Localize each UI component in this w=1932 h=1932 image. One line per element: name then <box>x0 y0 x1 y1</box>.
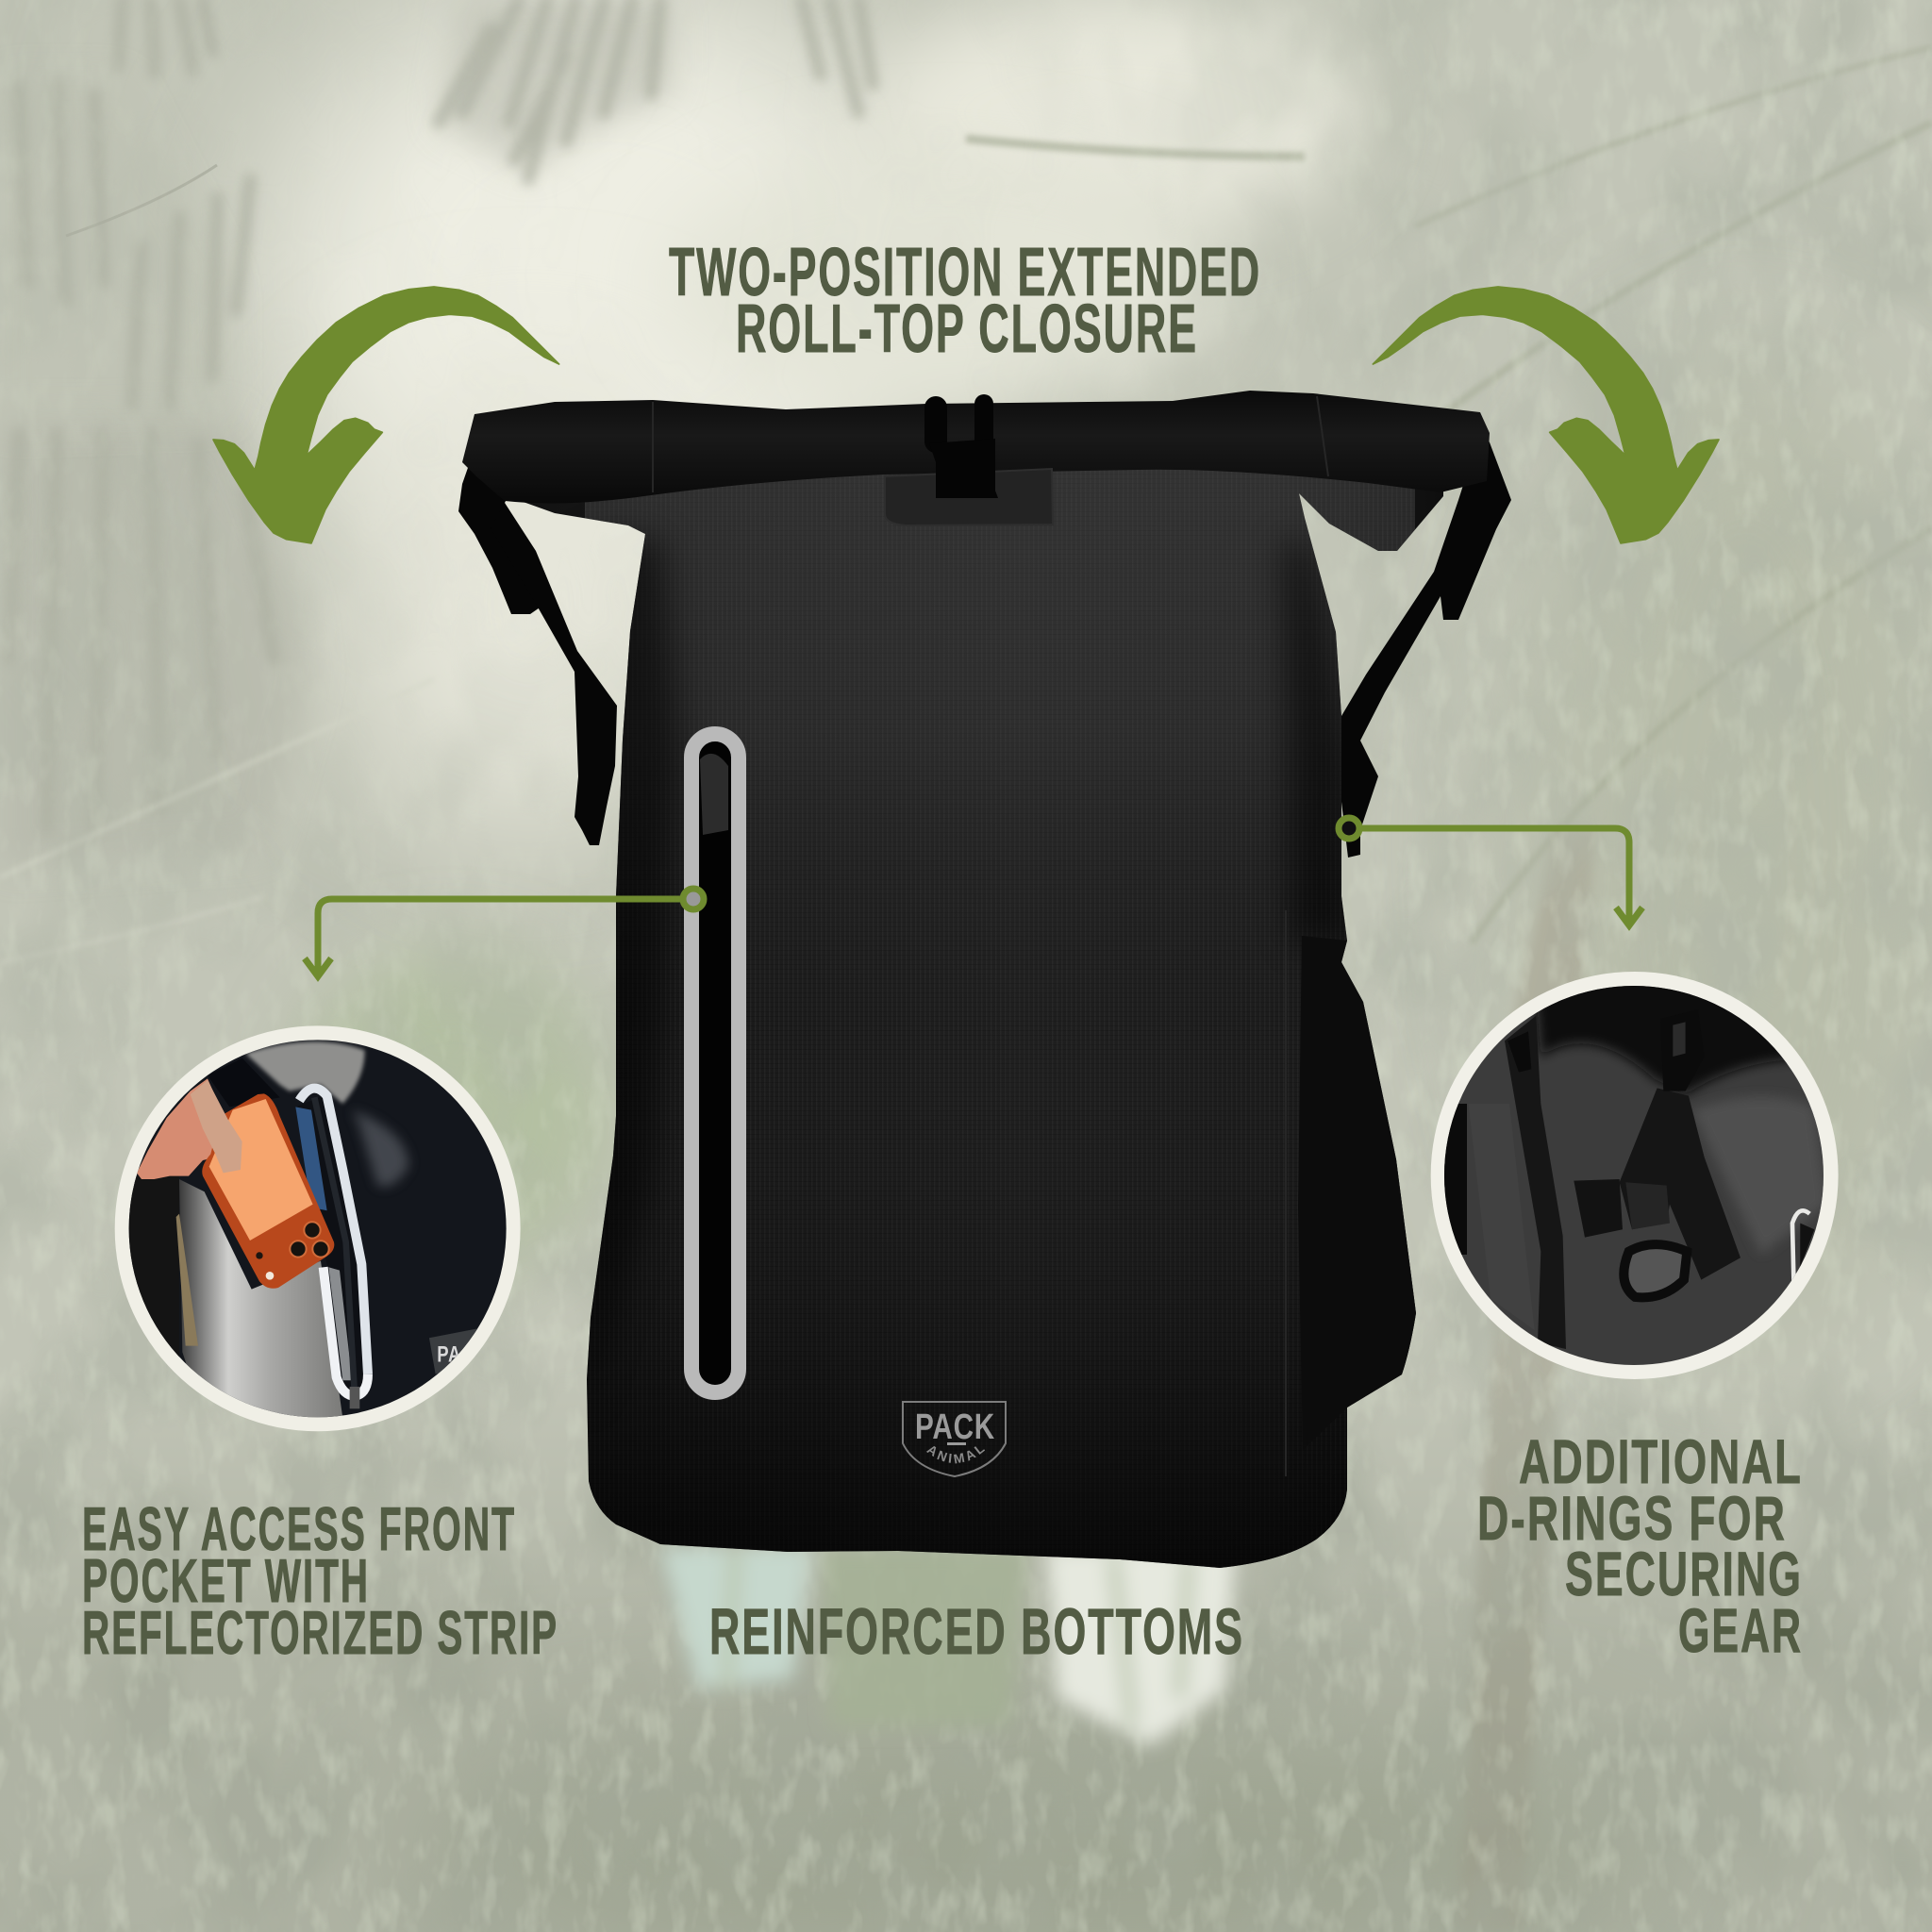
logo: Pack Animal shield <box>902 1401 1007 1477</box>
left side strap <box>458 443 617 845</box>
label: front pocket: EASY ACCESS FRONT <box>82 1494 516 1563</box>
logo: Pack Animal shield: ANIMAL <box>926 1445 985 1464</box>
right side strap <box>1341 429 1511 858</box>
front pocket reflective strip <box>691 734 739 1392</box>
circle photo: D-ring strap close-up <box>1431 972 1839 1379</box>
backpack <box>458 391 1511 1568</box>
label: reinforced bottoms: REINFORCED BOTTOMS <box>709 1595 1244 1668</box>
mesh side pocket <box>1286 910 1416 1476</box>
backpack body <box>505 453 1443 1568</box>
top buckle <box>924 394 998 498</box>
heading: roll-top closure: ROLL-TOP CLOSURE <box>736 291 1198 367</box>
heading: roll-top closure: TWO-POSITION EXTENDED <box>669 235 1261 310</box>
label: front pocket <box>82 1494 558 1667</box>
front patch under buckle <box>885 469 1053 525</box>
conifer drooping branches <box>9 0 873 830</box>
label: front pocket: POCKET WITH <box>82 1546 370 1615</box>
circle photo: hand pulling phone from pocket <box>115 1025 521 1431</box>
heading: roll-top closure <box>669 235 1261 367</box>
connector: front pocket <box>305 889 704 976</box>
connector: D-rings <box>1339 818 1642 925</box>
conifer masses <box>0 415 311 868</box>
small logo patch: PAC <box>437 1341 475 1367</box>
label: D-rings: D-RINGS FOR <box>1477 1483 1787 1553</box>
small logo patch <box>429 1328 478 1374</box>
hand <box>137 1078 242 1179</box>
label: D-rings <box>1477 1426 1803 1665</box>
body weave texture <box>585 453 1415 1575</box>
label: D-rings: GEAR <box>1678 1595 1803 1665</box>
water gap at the bottom <box>660 1547 1236 1745</box>
phone <box>202 1093 334 1289</box>
label: D-rings: ADDITIONAL <box>1519 1426 1803 1496</box>
thumb over the phone <box>191 1080 242 1173</box>
arrow: left curved arrow <box>213 287 559 543</box>
roll-top closure band <box>462 391 1490 503</box>
arrow: right curved arrow <box>1373 287 1719 543</box>
logo: Pack Animal shield: PACK <box>915 1407 995 1447</box>
label: front pocket: REFLECTORIZED STRIP <box>82 1598 558 1667</box>
label: D-rings: SECURING <box>1565 1539 1803 1608</box>
